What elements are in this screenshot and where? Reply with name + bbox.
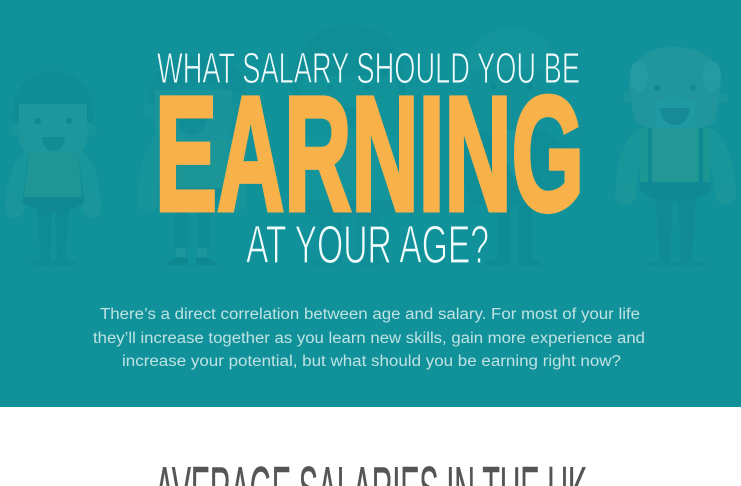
character: man in suit bbox=[458, 29, 570, 265]
intro paragraph: they’ll increase together as you learn new skills, gain more experience and bbox=[93, 330, 645, 347]
title: at your age: AT YOUR AGE? bbox=[246, 215, 489, 275]
character: young boy bbox=[4, 71, 102, 266]
intro paragraph bbox=[93, 306, 645, 370]
character: old man with suspenders bbox=[615, 47, 736, 267]
intro paragraph: There’s a direct correlation between age and salary. For most of your life bbox=[100, 306, 640, 323]
character: middle-aged man bbox=[293, 24, 405, 265]
intro paragraph: increase your potential, but what should you be earning right now? bbox=[122, 353, 621, 370]
character: young woman bbox=[138, 56, 246, 265]
